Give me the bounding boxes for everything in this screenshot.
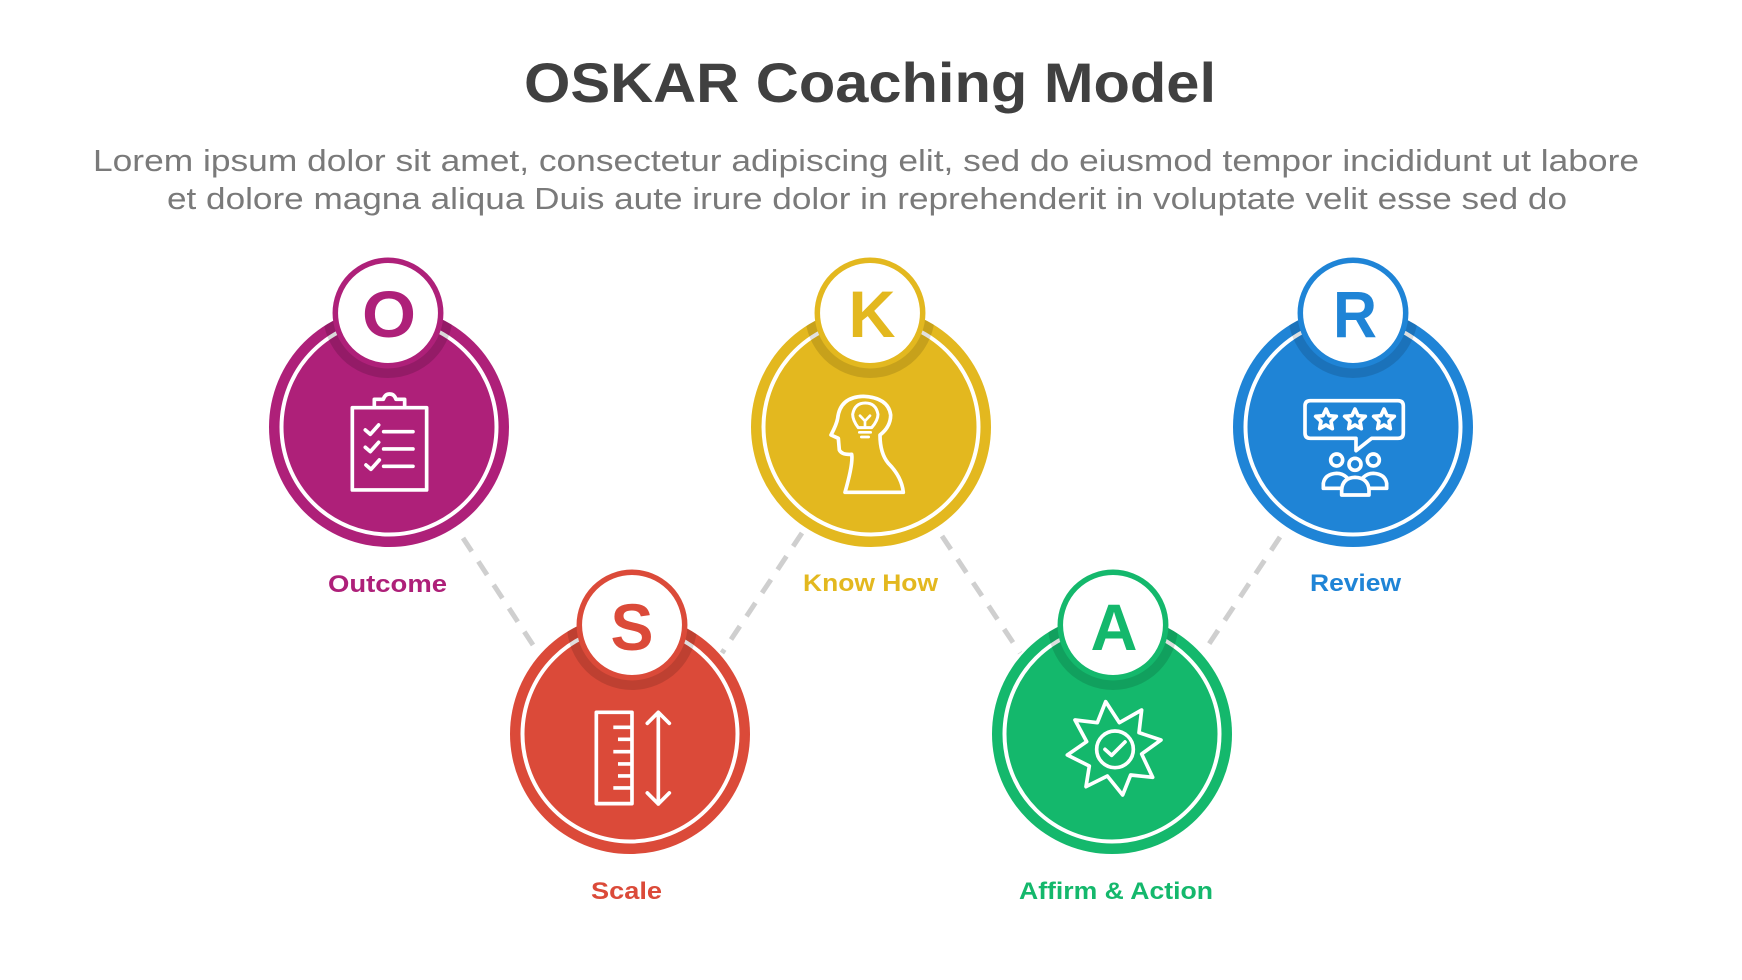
icon: starburst with check	[1067, 702, 1161, 795]
node A: Affirm & Action	[992, 560, 1232, 905]
badge A	[1060, 572, 1166, 678]
badge K: K	[848, 277, 896, 351]
icon: rating bubble and people	[1305, 401, 1403, 495]
badge R: R	[1333, 277, 1377, 351]
label: Review: Review	[1310, 570, 1401, 597]
main circle O	[269, 307, 509, 547]
subtitle text: Lorem ipsum dolor sit amet, consectetur adipiscing elit, sed do eiusmod tempor incididunt ut labore	[93, 143, 1639, 178]
node O: Outcome	[269, 248, 509, 598]
badge K	[817, 260, 923, 366]
label: Outcome: Outcome	[328, 571, 447, 598]
badge R	[1300, 260, 1406, 366]
badge O: O	[362, 277, 416, 351]
icon: clipboard	[352, 394, 427, 490]
label: Affirm & Action: Affirm & Action	[1019, 878, 1213, 905]
main circle R	[1233, 307, 1473, 547]
title: OSKAR Coaching Model	[524, 51, 1216, 114]
node K: Know How	[751, 248, 991, 597]
icon: ruler and arrow	[596, 712, 669, 804]
dashed connectors	[463, 533, 1280, 653]
node S: Scale	[510, 560, 750, 905]
node R: Review	[1233, 248, 1473, 597]
badge O	[335, 260, 441, 366]
badge S	[579, 572, 685, 678]
main circle A	[992, 614, 1232, 854]
icon: head with light bulb	[831, 396, 903, 492]
subtitle text	[93, 143, 1639, 216]
main circle S	[510, 614, 750, 854]
main circle K	[751, 307, 991, 547]
subtitle text: et dolore magna aliqua Duis aute irure dolor in reprehenderit in voluptate velit esse sed do	[167, 181, 1567, 216]
label: Know How: Know How	[803, 570, 938, 597]
badge A: A	[1090, 590, 1138, 664]
badge S: S	[610, 590, 654, 664]
label: Scale: Scale	[591, 878, 662, 905]
